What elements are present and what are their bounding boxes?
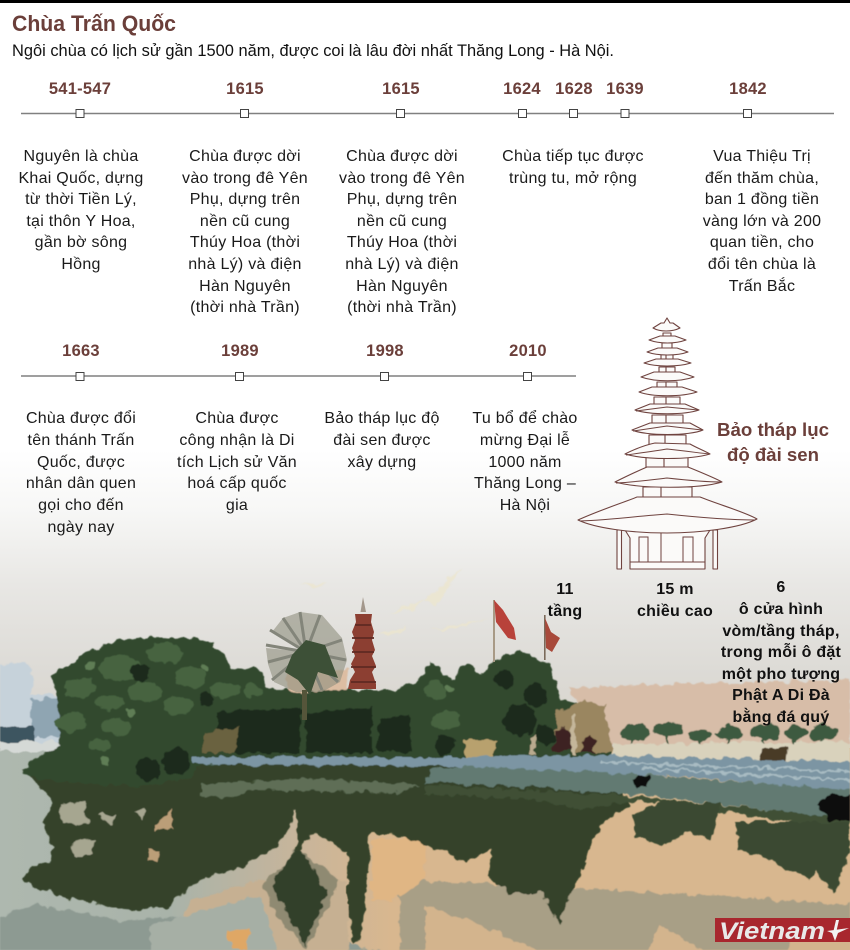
text: 1615 second: Phụ, dựng trên — [347, 191, 457, 208]
red pagoda — [348, 597, 376, 689]
text: 541-547: gần bờ sông — [35, 234, 127, 251]
stat: 6 ô cửa: ô cửa hình — [739, 601, 823, 618]
text: 1663: ngày nay — [47, 519, 115, 536]
stat: 11 tầng — [548, 581, 582, 620]
top black bar — [0, 0, 850, 3]
text: 1998: đài sen được — [333, 432, 431, 449]
text: 1842: ban 1 đồng tiền — [705, 191, 819, 208]
text: 2010: Hà Nội — [500, 497, 550, 514]
stat: 15 m chiều cao — [637, 581, 713, 620]
text: 2010: Thăng Long – — [474, 475, 576, 492]
main tree mass — [23, 637, 612, 787]
text: 1842 — [703, 148, 821, 295]
palm reflection — [262, 850, 340, 948]
text: 1663 — [26, 409, 136, 536]
text: 1663: gọi cho đến — [38, 497, 124, 514]
text: 2010: Tu bổ để chào — [472, 409, 578, 427]
sky wisps — [300, 568, 488, 635]
text: 1615 second: nền cũ cung — [357, 213, 447, 230]
palm tree — [266, 612, 347, 720]
stat: 15 m chiều cao: chiều cao — [637, 603, 713, 620]
years row 1: 1615 — [226, 80, 264, 98]
text: 1624-1639 — [502, 148, 644, 187]
title: Chùa Trấn Quốc — [12, 11, 176, 36]
foliage shadows — [131, 664, 555, 782]
text: 541-547: Nguyên là chùa — [24, 148, 138, 165]
years row 1: 1624 — [503, 80, 541, 98]
stat: 6 ô cửa: bằng đá quý — [733, 707, 829, 726]
timeline row 1 — [21, 110, 834, 118]
text: 1615 first: Chùa được dời — [189, 148, 301, 165]
text: 541-547: tại thôn Y Hoa, — [26, 213, 136, 230]
text: 2010: mừng Đại lễ — [480, 430, 570, 449]
text: 1842: quan tiền, cho — [710, 234, 814, 251]
text: 1615 second: Chùa được dời — [346, 148, 458, 165]
logo: Vietnam+ — [715, 918, 850, 945]
text: 1615 second: Hàn Nguyên — [356, 278, 448, 295]
pale reflection spots — [60, 803, 145, 855]
text: 1615 first: Phụ, dựng trên — [190, 191, 300, 208]
temple gate — [555, 700, 612, 752]
text: 1989: hoá cấp quốc — [187, 475, 287, 492]
text: 1989: tích Lịch sử Văn — [177, 454, 297, 471]
text: 1615 second: vào trong đê Yên — [339, 170, 465, 187]
text: 1842: vàng lớn và 200 — [703, 213, 821, 230]
text: 1615 first: nền cũ cung — [200, 213, 290, 230]
reflection — [22, 755, 630, 943]
text: 541-547: từ thời Tiền Lý, — [25, 191, 137, 208]
city buildings — [0, 662, 66, 745]
text: 1998: Bảo tháp lục độ — [324, 410, 440, 427]
years row 2: 2010 — [509, 342, 547, 360]
icon: lotus stupa drawing — [578, 318, 757, 569]
text: 1989 — [177, 410, 297, 514]
peach cloud — [568, 680, 850, 745]
years row 1: 541-547 — [49, 80, 111, 98]
bottom water bands — [0, 905, 400, 950]
far shore trees — [620, 722, 837, 757]
years row 1: 1842 — [729, 80, 767, 98]
text: 1615 second: Thúy Hoa (thời — [347, 234, 457, 251]
stat: 6 ô cửa: 6 — [776, 579, 786, 596]
stat: 6 ô cửa: một pho tượng — [722, 666, 840, 683]
text: 541-547: Hồng — [61, 256, 101, 273]
years row 2: 1989 — [221, 342, 259, 360]
text: 1842: Vua Thiệu Trị — [713, 148, 811, 165]
logo: Vietnam+: Vietnam — [719, 918, 825, 945]
stat: 11 tầng: tầng — [548, 603, 582, 620]
text: 1615 first — [182, 148, 308, 316]
stupa label: độ đài sen — [727, 444, 819, 465]
years row 2: 1998 — [366, 342, 404, 360]
text: 1624-1639: Chùa tiếp tục được — [502, 148, 644, 165]
text: 1989: Chùa được — [195, 410, 279, 427]
stone embankment — [193, 755, 850, 792]
text: 1615 first: vào trong đê Yên — [182, 170, 308, 187]
text: 1989: công nhận là Di — [179, 432, 295, 449]
stat: 6 ô cửa: Phật A Di Đà — [732, 687, 830, 704]
stat: 6 ô cửa: trong mỗi ô đặt — [721, 642, 842, 661]
text: 1842: đến thăm chùa, — [705, 170, 819, 187]
text: 1998 — [324, 410, 440, 471]
years row 2: 1663 — [62, 342, 100, 360]
years row 1 — [49, 80, 767, 98]
years row 1: 1628 — [555, 80, 593, 98]
foliage highlights — [56, 643, 459, 751]
text: 1663: Chùa được đổi — [26, 409, 136, 427]
text: 1615 first: (thời nhà Trần) — [190, 299, 300, 316]
flags — [493, 600, 560, 662]
timeline row 2 — [21, 372, 576, 380]
text: 1663: Quốc, được — [37, 454, 125, 471]
text: 1615 first: Thúy Hoa (thời — [190, 234, 300, 251]
text: 1663: nhân dân quen — [26, 475, 136, 492]
text: 1842: Trấn Bắc — [729, 276, 795, 295]
years row 1: 1639 — [606, 80, 644, 98]
stupa label — [717, 419, 829, 465]
right water reflections — [425, 785, 850, 830]
text: 1989: gia — [226, 497, 248, 514]
text: 541-547 — [18, 148, 144, 273]
years row 2 — [62, 342, 547, 360]
text: 1615 second: (thời nhà Trần) — [347, 299, 457, 316]
text: 2010: 1000 năm — [488, 454, 562, 471]
embankment arches — [632, 774, 850, 820]
stupa label: Bảo tháp lục — [717, 419, 829, 440]
years row 1: 1615 — [382, 80, 420, 98]
stat: 6 ô cửa: vòm/tầng tháp, — [722, 623, 840, 640]
text: 1624-1639: trùng tu, mở rộng — [509, 170, 637, 187]
text: 1615 second — [339, 148, 465, 316]
stat: 15 m chiều cao: 15 m — [656, 581, 694, 598]
text: 1615 second: nhà Lý) và điện — [345, 256, 459, 273]
text: 1842: đổi tên chùa là — [708, 255, 816, 273]
stat: 11 tầng: 11 — [556, 581, 574, 598]
subtitle: Ngôi chùa có lịch sử gần 1500 năm, được coi là lâu đời nhất Thăng Long - Hà Nội. — [12, 42, 614, 60]
text: 541-547: Khai Quốc, dựng — [18, 170, 144, 187]
text: 1615 first: nhà Lý) và điện — [188, 256, 302, 273]
text: 2010 — [472, 409, 578, 514]
stat: 6 ô cửa — [721, 579, 842, 726]
text: 1663: tên thánh Trấn — [28, 432, 134, 449]
text: 1998: xây dựng — [348, 454, 416, 471]
text: 1615 first: Hàn Nguyên — [199, 278, 291, 295]
